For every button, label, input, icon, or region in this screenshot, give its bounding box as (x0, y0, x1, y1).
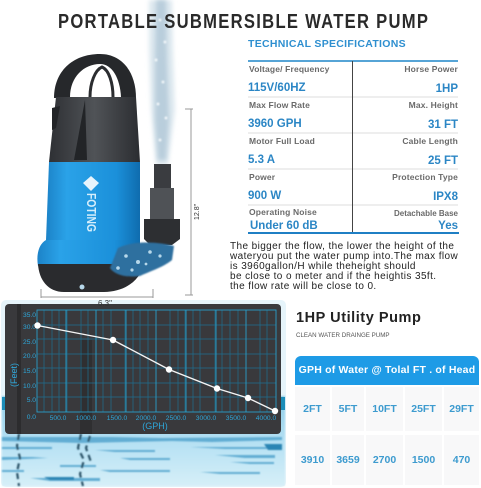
x axis labels: 2000.0 (136, 415, 157, 422)
y axis labels: 15.0 (23, 368, 36, 375)
table cells: 3910 (301, 454, 324, 466)
pump handle (54, 54, 136, 98)
y axis labels (23, 312, 36, 421)
x axis labels: 3500.0 (226, 415, 247, 422)
x axis labels: 1500.0 (107, 415, 128, 422)
dimension label: 6.3: 6.3" (98, 299, 112, 308)
flow curve (34, 322, 278, 414)
y axis labels: 20.0 (23, 353, 36, 360)
table cells (301, 403, 474, 466)
table cells: 3659 (336, 454, 360, 466)
table cells: 10FT (372, 403, 397, 415)
spec value: horse power: 1HP (436, 83, 458, 95)
spec: voltage: Voltage/ Frequency (249, 64, 329, 74)
y axis labels: 10.0 (23, 383, 36, 390)
description text: is 3960gallon/H while theheight should (230, 261, 416, 272)
description text (230, 241, 458, 292)
y axis labels: 5.0 (27, 397, 36, 404)
x axis labels (50, 415, 277, 422)
x axis labels: 3000.0 (196, 415, 217, 422)
table cells: 5FT (339, 403, 357, 415)
table cells: 2700 (373, 454, 396, 466)
spec value: power: 900 W (248, 190, 281, 202)
spec value: motor load: 5.3 A (248, 154, 275, 166)
table header (295, 356, 479, 385)
axis title: GPH: (GPH) (142, 421, 168, 431)
spec: cable length: Cable Length (402, 136, 458, 146)
pump blue body (46, 162, 140, 240)
spec value: protection: IPX8 (433, 191, 458, 203)
table cells: 2FT (303, 403, 322, 415)
heading: technical specifications: TECHNICAL SPECIFICATIONS (248, 38, 406, 50)
dimension: width (41, 289, 153, 298)
x axis labels: 4000.0 (256, 415, 277, 422)
table cells: 25FT (411, 403, 436, 415)
y axis labels: 30.0 (23, 324, 36, 331)
x axis labels: 1000.0 (76, 415, 97, 422)
description text: The bigger the flow, the lower the height of the (230, 241, 454, 252)
outlet connector (154, 164, 171, 190)
water photo backdrop (1, 300, 286, 487)
pump base (38, 264, 144, 292)
description text: wateryou put the water pump into.The max flow (230, 251, 458, 262)
icon: submersible pump (37, 54, 180, 292)
table cells: 470 (453, 454, 470, 466)
title: PORTABLE SUBMERSIBLE WATER PUMP (58, 11, 429, 33)
specs table lines (248, 61, 459, 233)
chart grid (37, 310, 276, 412)
spec: horse power: Horse Power (404, 64, 458, 74)
description text: the flow rate will be close to 0. (230, 281, 377, 292)
water splash (110, 242, 174, 277)
table header: GPH of Water @ Tolal FT . of Head (299, 364, 475, 376)
x axis labels: 500.0 (50, 415, 67, 422)
dimension label: 12.8: 12.8" (194, 203, 201, 220)
table cells: 29FT (449, 403, 474, 415)
spec: protection: Protection Type (392, 172, 458, 182)
icon: water jet (149, 0, 175, 165)
panel: performance chart (5, 304, 281, 434)
dimension: height (185, 109, 193, 295)
spec value: max height: 31 FT (428, 119, 458, 131)
subheading: CLEAN WATER DRAINGE PUMP (296, 332, 390, 339)
y axis labels: 25.0 (23, 339, 36, 346)
brand mark (83, 176, 99, 191)
y axis labels: 0.0 (27, 414, 36, 421)
spec value: cable length: 25 FT (428, 155, 458, 167)
spec value: noise: Under 60 dB (250, 220, 318, 232)
spec: max flow: Max Flow Rate (249, 100, 310, 110)
spec: base: Detachable Base (394, 209, 458, 218)
spec value: voltage: 115V/60HZ (248, 82, 306, 94)
spec: max height: Max. Height (409, 100, 458, 110)
spec: motor load: Motor Full Load (249, 136, 315, 146)
spec: power: Power (249, 172, 275, 182)
spec: noise: Operating Noise (249, 207, 317, 217)
y axis labels: 35.0 (23, 312, 36, 319)
x axis labels: 2500.0 (166, 415, 187, 422)
table cells: 1500 (412, 454, 435, 466)
spec value: base: Yes (438, 220, 458, 232)
spec value: max flow: 3960 GPH (248, 118, 302, 130)
description text: be close to o meter and if the heightis 35ft. (230, 271, 436, 282)
heading: 1HP utility pump: 1HP Utility Pump (296, 310, 421, 326)
brand name: FOTING (84, 193, 99, 232)
pump upper housing (49, 97, 140, 162)
axis title: Feet: (Feet) (9, 363, 19, 387)
